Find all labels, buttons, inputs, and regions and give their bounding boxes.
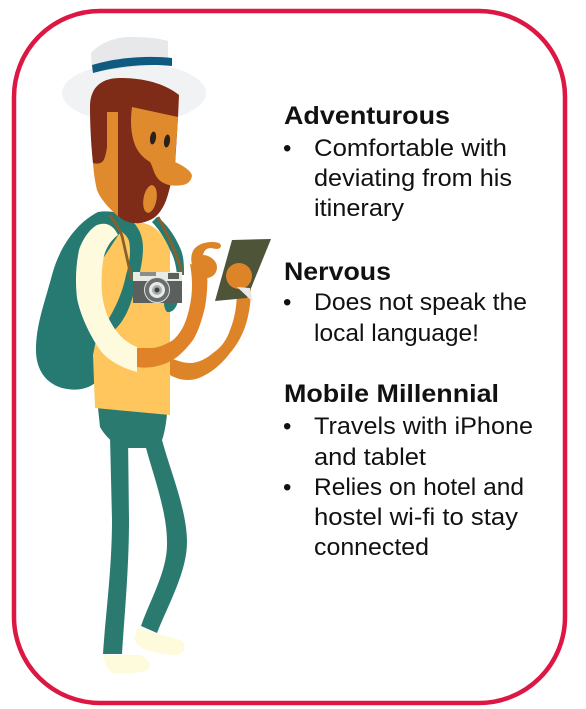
text: adventurous <box>283 102 512 222</box>
camera <box>110 215 182 303</box>
front arm <box>137 264 207 368</box>
strap knob under camera <box>164 300 178 312</box>
text: adventurous: Comfortable with <box>314 135 507 162</box>
tablet <box>215 239 271 301</box>
right strap <box>152 217 184 275</box>
bullet list: • <box>283 135 291 162</box>
hand <box>226 263 252 289</box>
camera straps <box>110 215 182 280</box>
camera top <box>133 272 182 283</box>
back leg <box>141 440 187 633</box>
text: mobile millennial: Relies on hotel and <box>314 474 524 501</box>
front shoe <box>103 655 150 673</box>
camera body <box>133 281 182 303</box>
sleeve <box>76 224 137 372</box>
front leg <box>103 436 129 654</box>
skin side of head <box>92 105 120 218</box>
text: mobile millennial: • <box>283 474 291 501</box>
paper corner <box>237 287 253 302</box>
hips <box>98 408 167 448</box>
back arm <box>170 288 251 380</box>
backpack <box>36 212 125 390</box>
index finger <box>191 242 221 278</box>
bullet list: • <box>283 289 291 316</box>
hat band <box>92 57 172 73</box>
backpack strap <box>98 211 143 332</box>
shirt <box>93 223 170 415</box>
text: adventurous: itinerary <box>314 195 404 222</box>
back shoe <box>135 627 185 655</box>
hair and beard <box>90 78 179 223</box>
text: nervous: Does not speak the <box>314 289 527 316</box>
text: mobile millennial <box>283 380 533 561</box>
face <box>131 107 192 186</box>
mouth <box>141 184 159 214</box>
heading: Adventurous <box>284 102 450 130</box>
hat crown <box>91 37 168 72</box>
heading: Mobile Millennial <box>284 380 499 408</box>
eyes <box>149 131 157 145</box>
text: mobile millennial: hostel wi-fi to stay <box>314 504 518 531</box>
camera lens <box>144 278 170 302</box>
text: mobile millennial: and tablet <box>314 444 426 471</box>
bullet list: • <box>283 413 291 440</box>
hat brim <box>62 63 206 123</box>
text: adventurous: deviating from his <box>314 165 512 192</box>
text: mobile millennial: connected <box>314 534 429 561</box>
head and hair <box>90 78 192 223</box>
heading: Nervous <box>284 258 391 286</box>
text: nervous: local language! <box>314 320 479 347</box>
text: nervous <box>283 258 527 347</box>
illustration: traveller <box>36 37 271 673</box>
text: mobile millennial: Travels with iPhone <box>314 413 533 440</box>
